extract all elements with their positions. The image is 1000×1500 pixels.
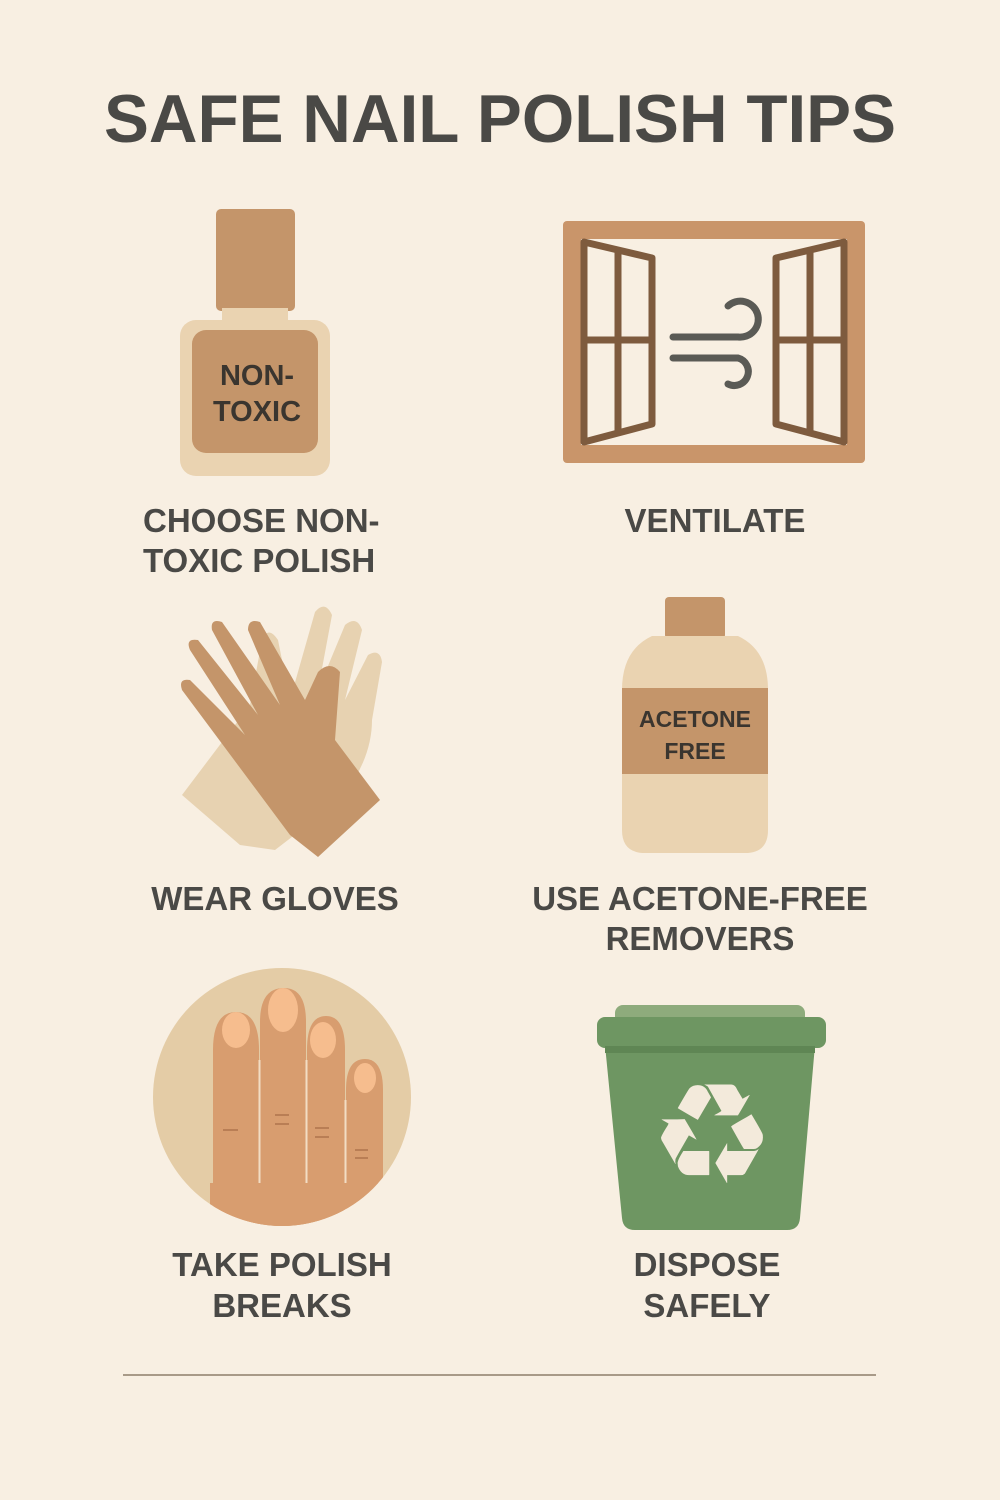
label: dispose safely: SAFELY	[643, 1287, 771, 1324]
label: use acetone-free removers	[532, 880, 868, 957]
label: dispose safely	[634, 1246, 780, 1324]
label: take polish breaks: BREAKS	[212, 1287, 352, 1324]
label: ventilate: VENTILATE	[625, 502, 805, 539]
label: take polish breaks	[172, 1246, 392, 1324]
label: wear gloves: WEAR GLOVES	[151, 880, 399, 917]
icon: open window	[563, 221, 865, 463]
icon: hand in circle	[153, 968, 411, 1243]
icon: recycling bin	[597, 1005, 826, 1230]
icon: nail polish bottle	[180, 209, 330, 476]
label: dispose safely: DISPOSE	[634, 1246, 780, 1283]
label: take polish breaks: TAKE POLISH	[172, 1246, 392, 1283]
label: choose non-toxic polish	[143, 502, 380, 579]
icon: gloves	[181, 607, 382, 857]
icon: wind	[673, 301, 758, 386]
icon: nail polish bottle: TOXIC	[213, 396, 301, 428]
label: use acetone-free removers: USE ACETONE-FREE	[532, 880, 868, 917]
icon: nail polish bottle: NON-	[220, 360, 294, 392]
title: SAFE NAIL POLISH TIPS	[104, 81, 896, 157]
label: choose non-toxic polish: TOXIC POLISH	[143, 542, 375, 579]
label: choose non-toxic polish: CHOOSE NON-	[143, 502, 380, 539]
label: use acetone-free removers: REMOVERS	[606, 920, 794, 957]
icon: acetone-free remover bottle	[622, 597, 768, 853]
icon: recycle symbol: ♻	[649, 1054, 775, 1217]
icon: acetone-free remover bottle: FREE	[664, 738, 726, 764]
icon: acetone-free remover bottle: ACETONE	[639, 706, 751, 732]
